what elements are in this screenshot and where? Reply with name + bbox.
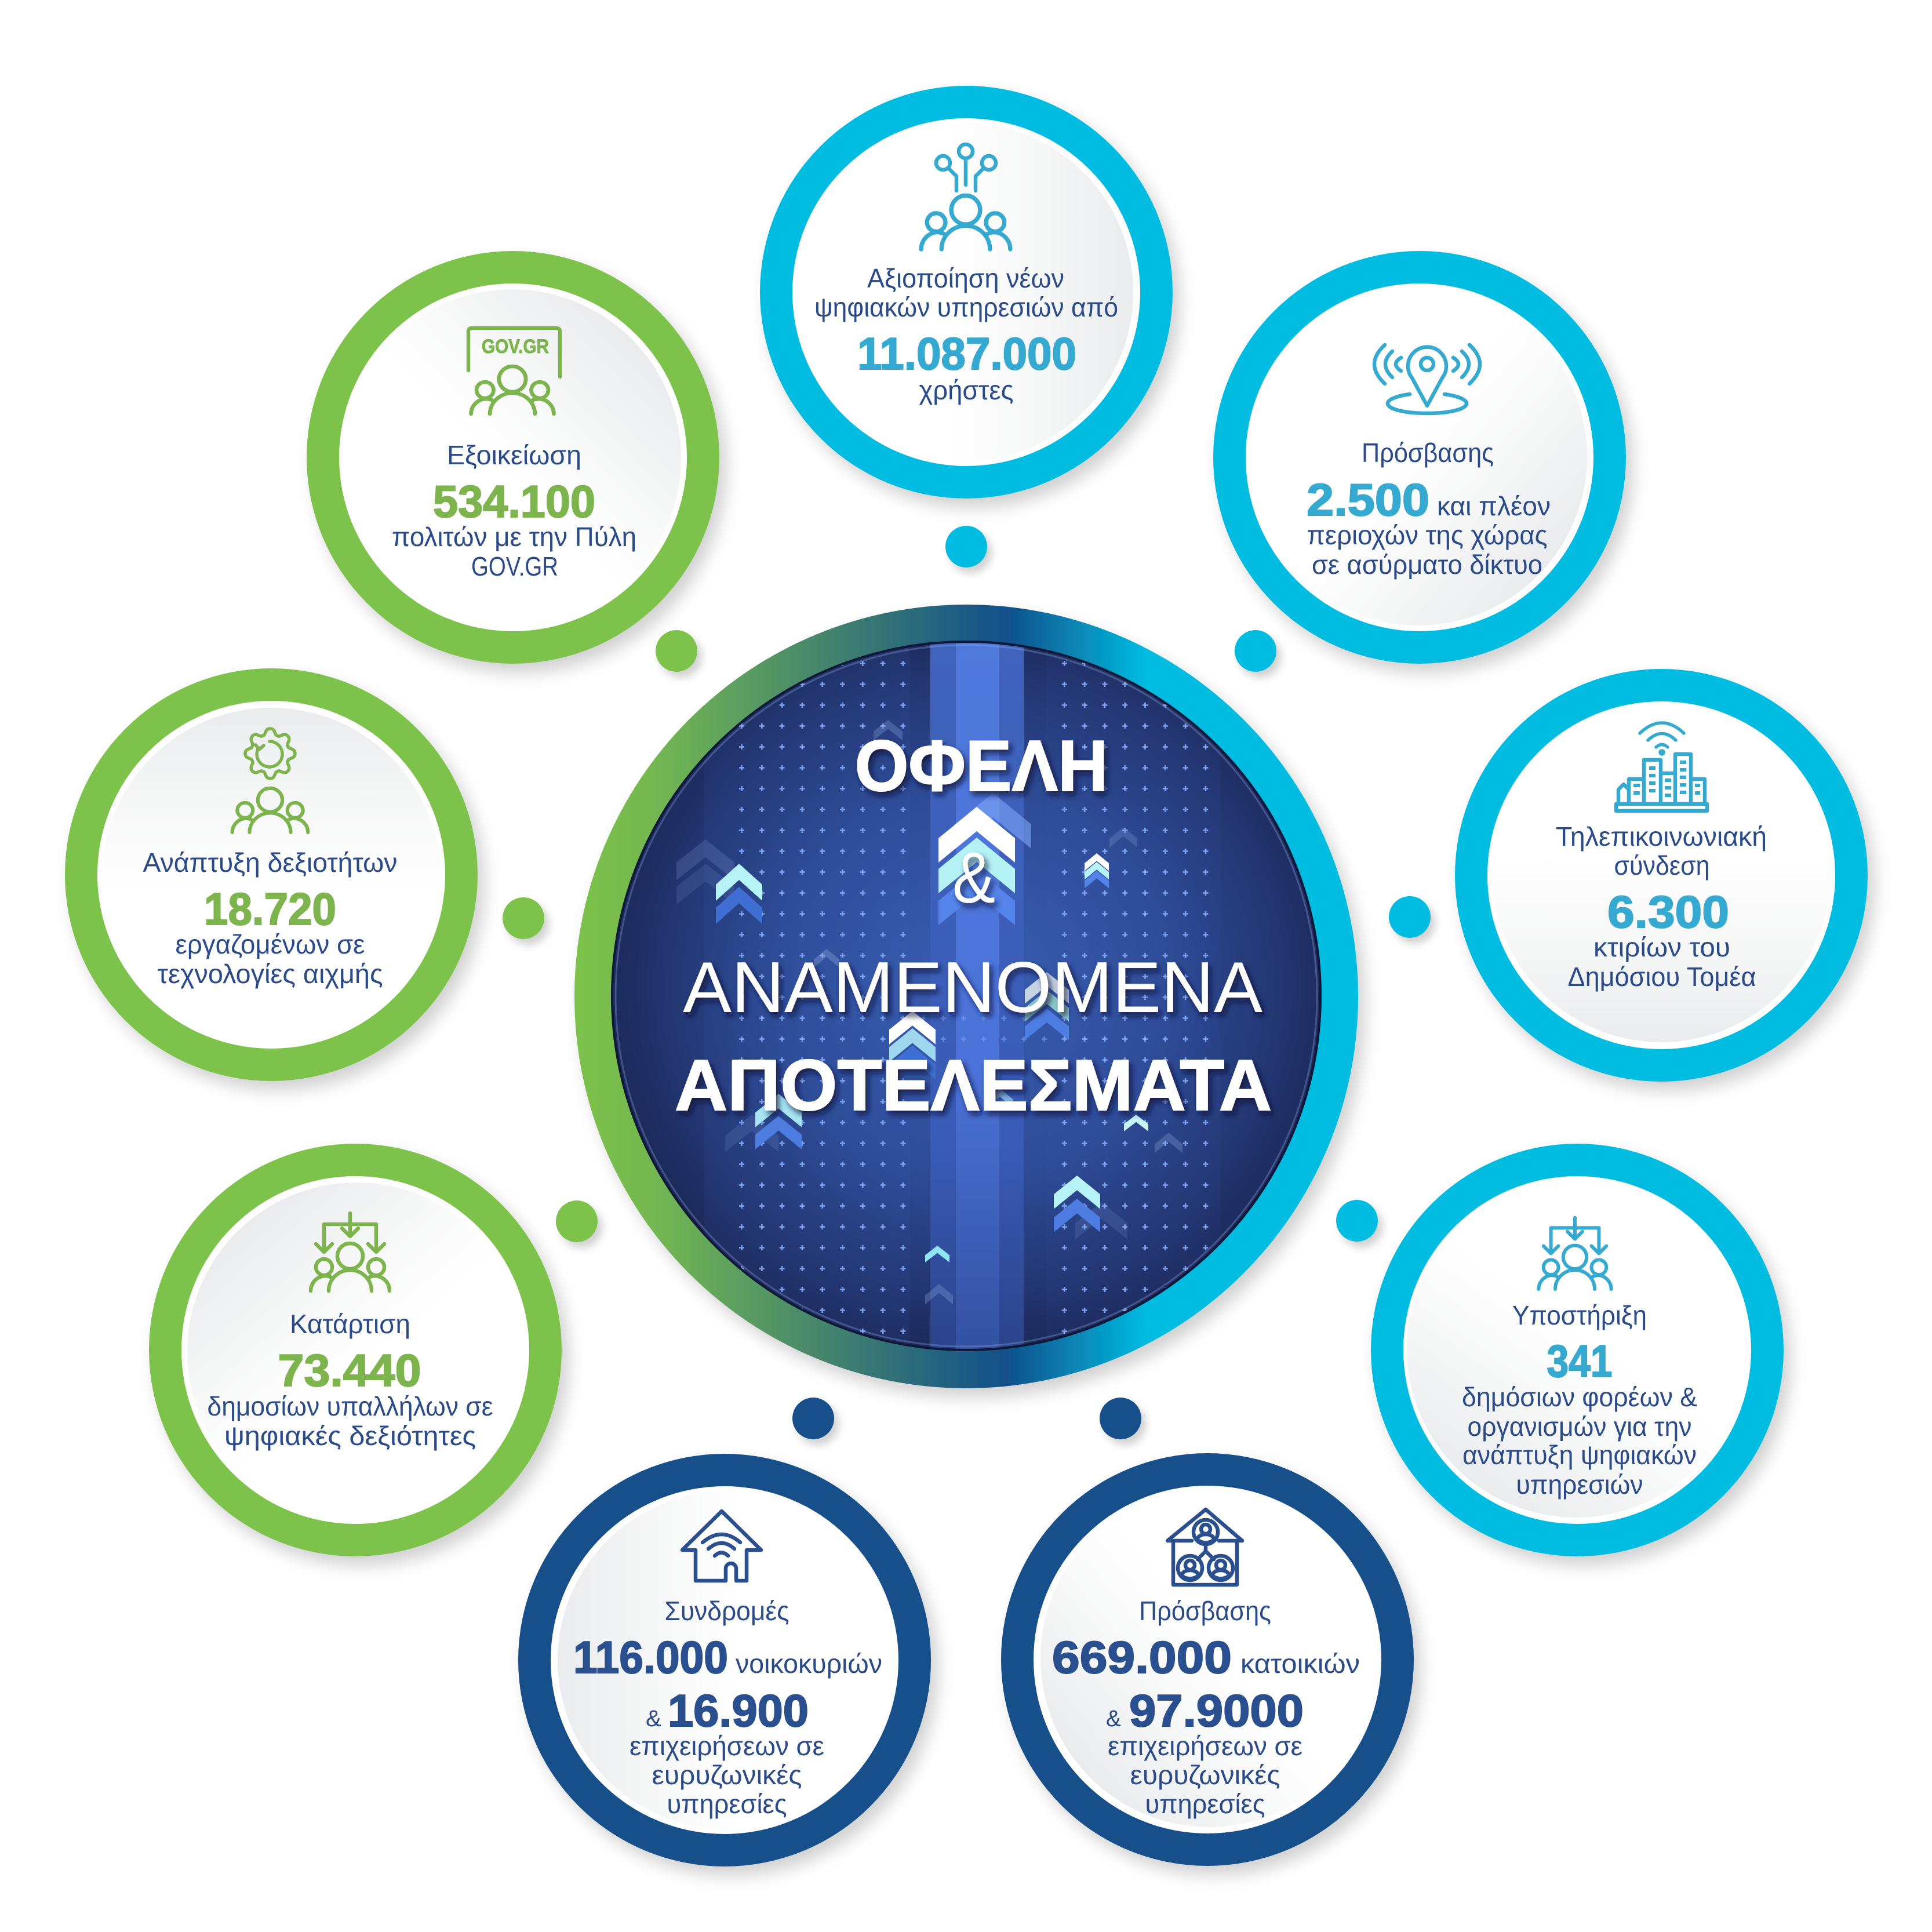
- text: υπηρεσίες: [667, 1789, 787, 1819]
- text: χρήστες: [919, 375, 1013, 405]
- text: 16.900: [668, 1685, 809, 1736]
- text: Τηλεπικοινωνιακή: [1556, 821, 1767, 852]
- text: 669.000: [1052, 1632, 1232, 1683]
- text: πολιτών με την Πύλη: [392, 522, 636, 552]
- text: νοικοκυριών: [736, 1649, 882, 1679]
- title: ΟΦΕΛΗ: [854, 726, 1108, 806]
- text: υπηρεσίες: [1145, 1789, 1265, 1819]
- text: GOV.GR: [471, 551, 558, 581]
- icon: GOV.GR board and people: GOV.GR: [482, 336, 549, 358]
- text: σύνδεση: [1614, 850, 1710, 881]
- central circle: [574, 605, 1358, 1388]
- text: Αξιοποίηση νέων: [867, 263, 1064, 293]
- text: 534.100: [433, 476, 595, 527]
- icon: gear and people: [232, 729, 308, 832]
- text: 341: [1547, 1336, 1613, 1387]
- text: σε ασύρματο δίκτυο: [1312, 550, 1542, 580]
- text: Κατάρτιση: [290, 1309, 410, 1339]
- text: οργανισμών για την: [1468, 1411, 1691, 1442]
- text: Ανάπτυξη δεξιοτήτων: [143, 847, 398, 878]
- text: δημοσίων υπαλλήλων σε: [208, 1391, 493, 1421]
- text: 2.500: [1307, 474, 1429, 525]
- text: Συνδρομές: [664, 1596, 789, 1626]
- text: [573, 1596, 882, 1819]
- text: &: [1106, 1706, 1121, 1731]
- title: ΑΠΟΤΕΛΕΣΜΑΤΑ: [675, 1046, 1272, 1126]
- text: 116.000: [573, 1632, 728, 1683]
- text: τεχνολογίες αιχμής: [158, 959, 383, 989]
- text: [1052, 1596, 1360, 1819]
- text: Εξοικείωση: [447, 440, 581, 470]
- text: [143, 847, 398, 989]
- icon: training arrows with people: [311, 1213, 390, 1291]
- connector dots: [503, 526, 1431, 1439]
- text: Υποστήριξη: [1512, 1300, 1647, 1330]
- text: κτιρίων του: [1593, 932, 1730, 962]
- icon: location pin with signal: [1374, 345, 1480, 413]
- text: [208, 1309, 493, 1451]
- title: [675, 726, 1272, 1126]
- text: &: [646, 1706, 661, 1731]
- panel: skills development: [65, 668, 478, 1081]
- icon: training arrows with people: [1538, 1218, 1611, 1289]
- panel: telecom connection: [1455, 669, 1868, 1082]
- text: ψηφιακές δεξιότητες: [224, 1421, 476, 1451]
- text: Πρόσβασης: [1139, 1596, 1271, 1626]
- text: 18.720: [204, 883, 336, 934]
- text: [1307, 438, 1551, 580]
- text: κατοικιών: [1240, 1649, 1360, 1679]
- text: ψηφιακών υπηρεσιών από: [814, 292, 1118, 322]
- text: ευρυζωνικές: [652, 1760, 802, 1790]
- icon: house with people: [1167, 1509, 1242, 1585]
- text: υπηρεσιών: [1516, 1469, 1643, 1500]
- text: [392, 440, 636, 581]
- text: επιχειρήσεων σε: [1108, 1731, 1302, 1761]
- text: [1462, 1300, 1697, 1500]
- panel: subscriptions: [518, 1454, 931, 1866]
- panel: access households and businesses: [1001, 1453, 1414, 1866]
- icon: connected buildings: [1616, 723, 1707, 811]
- panel: training: [149, 1144, 562, 1556]
- text: 73.440: [278, 1345, 421, 1396]
- text: ανάπτυξη ψηφιακών: [1462, 1440, 1697, 1470]
- text: εργαζομένων σε: [175, 929, 365, 959]
- icon: GOV.GR board and people: [468, 328, 560, 414]
- text: και πλέον: [1437, 491, 1551, 521]
- panel: access to wireless network: [1213, 251, 1626, 664]
- text: Δημόσιου Τομέα: [1567, 962, 1756, 992]
- blue core with chevrons: [613, 643, 1319, 1349]
- text: ευρυζωνικές: [1130, 1760, 1280, 1790]
- gradient ring: [574, 605, 1358, 1388]
- icon: house with wifi: [682, 1511, 761, 1581]
- panel: familiarity with GOV.GR: [307, 251, 719, 664]
- text: δημόσιων φορέων &: [1462, 1382, 1697, 1412]
- text: επιχειρήσεων σε: [630, 1731, 824, 1761]
- text: 97.9000: [1129, 1685, 1304, 1736]
- panel: users of digital services: [760, 86, 1173, 499]
- text: Πρόσβασης: [1362, 438, 1494, 468]
- text: [814, 263, 1118, 405]
- text: [1556, 821, 1767, 992]
- title: ΑΝΑΜΕΝΟΜΕΝΑ: [683, 948, 1262, 1028]
- panel: support of public bodies: [1371, 1144, 1784, 1556]
- text: 11.087.000: [857, 328, 1076, 379]
- text: περιοχών της χώρας: [1307, 520, 1548, 550]
- title: &: [952, 838, 995, 918]
- icon: network people: [921, 144, 1010, 249]
- text: 6.300: [1607, 886, 1729, 937]
